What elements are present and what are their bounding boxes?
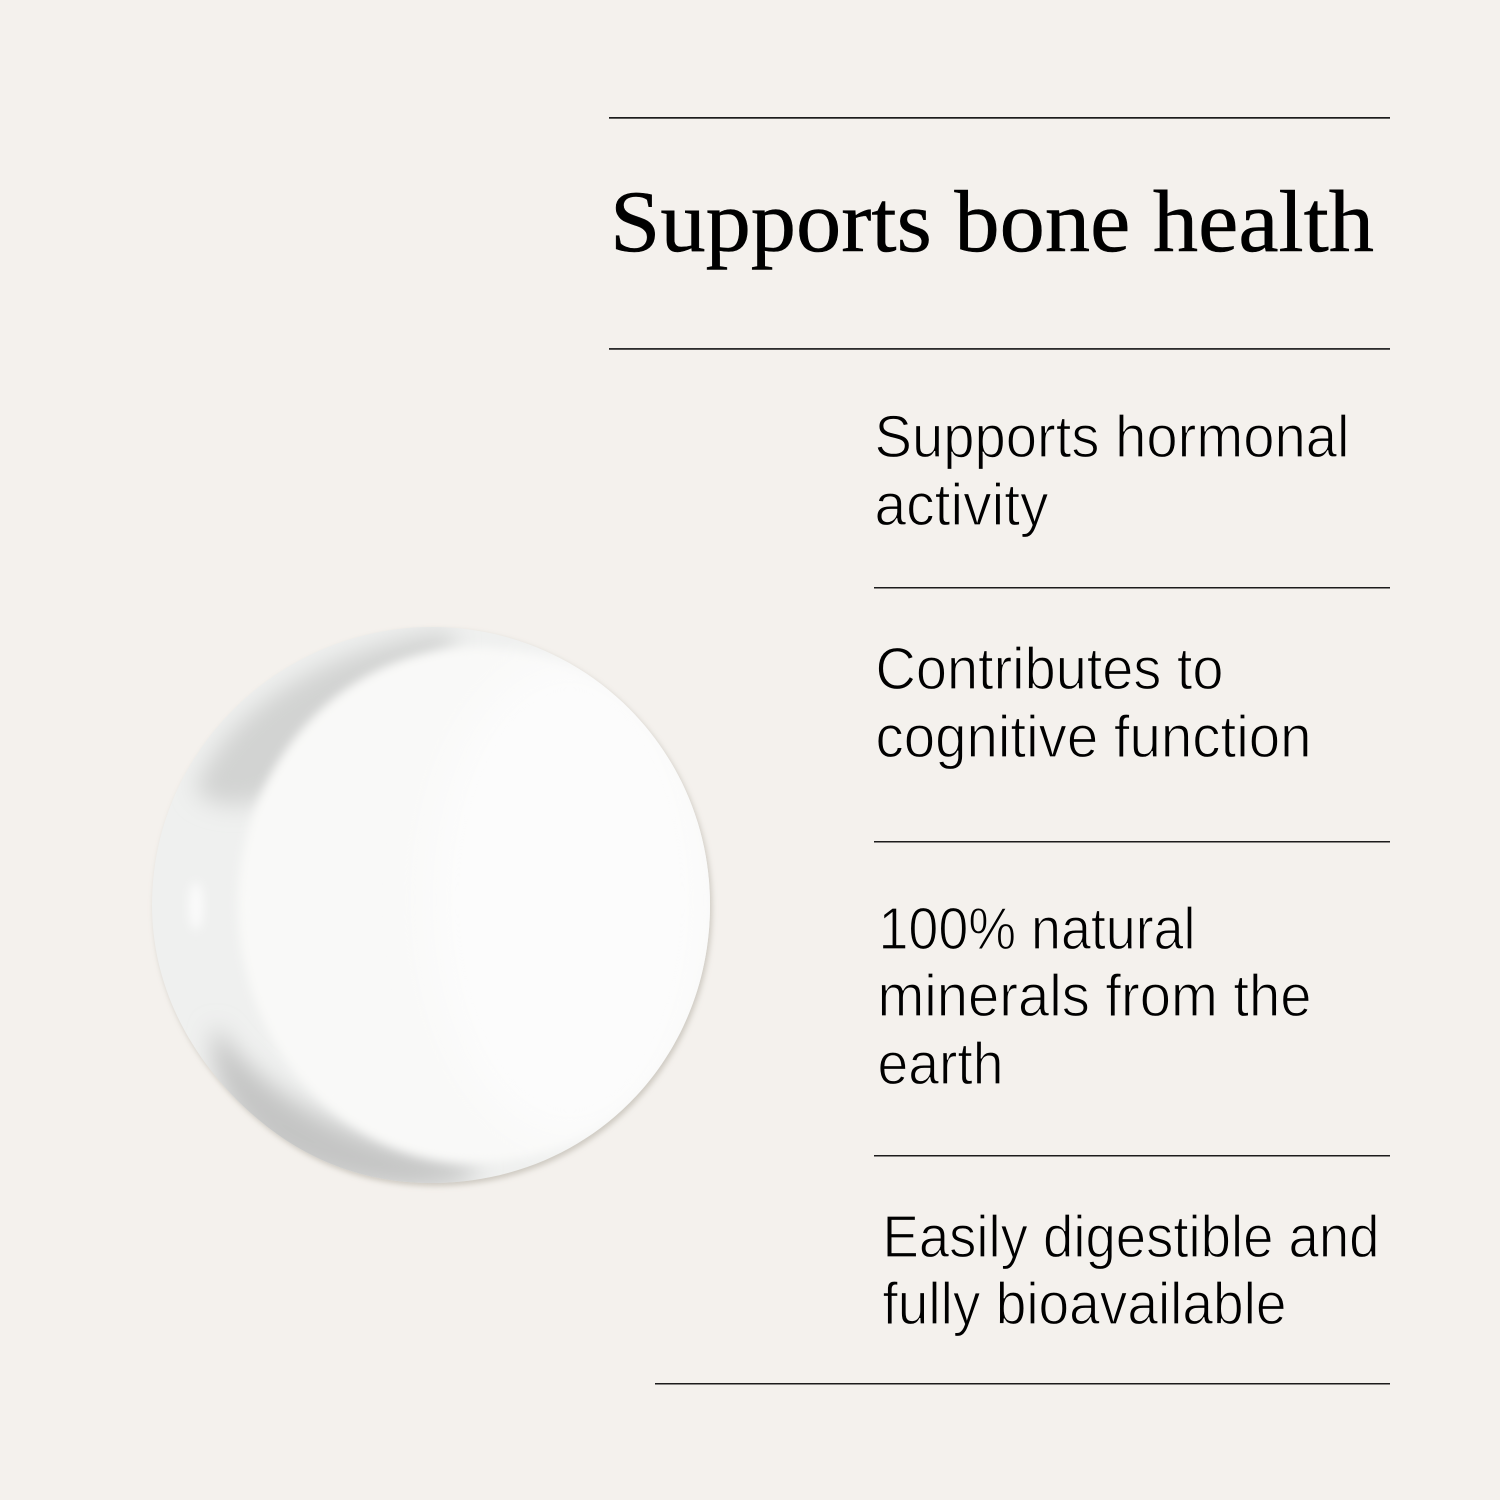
benefit: digestible and bioavailable — [882, 1203, 1380, 1337]
benefit: cognitive function: Contributes to — [876, 635, 1224, 702]
benefit: hormonal activity: Supports hormonal — [874, 403, 1350, 470]
benefit: digestible and bioavailable: fully bioavailable — [882, 1270, 1286, 1337]
benefit: hormonal activity — [874, 403, 1350, 538]
divider 2 — [874, 841, 1390, 842]
benefit: natural minerals: earth — [878, 1030, 1004, 1097]
divider 4 — [655, 1383, 1390, 1384]
benefit: hormonal activity: activity — [874, 471, 1049, 538]
header rule bottom — [609, 348, 1390, 350]
white mineral powder disc — [140, 615, 730, 1195]
title: Supports bone health — [610, 174, 1374, 271]
benefit: natural minerals: 100% natural — [878, 895, 1196, 962]
benefit: natural minerals: minerals from the — [878, 962, 1312, 1029]
benefit: cognitive function — [876, 635, 1312, 770]
benefit: natural minerals — [878, 895, 1312, 1097]
header rule top — [609, 117, 1390, 119]
benefit: digestible and bioavailable: Easily digestible and — [882, 1203, 1380, 1270]
benefit: cognitive function: cognitive function — [876, 703, 1312, 770]
divider 3 — [874, 1155, 1390, 1156]
divider 1 — [874, 587, 1390, 588]
